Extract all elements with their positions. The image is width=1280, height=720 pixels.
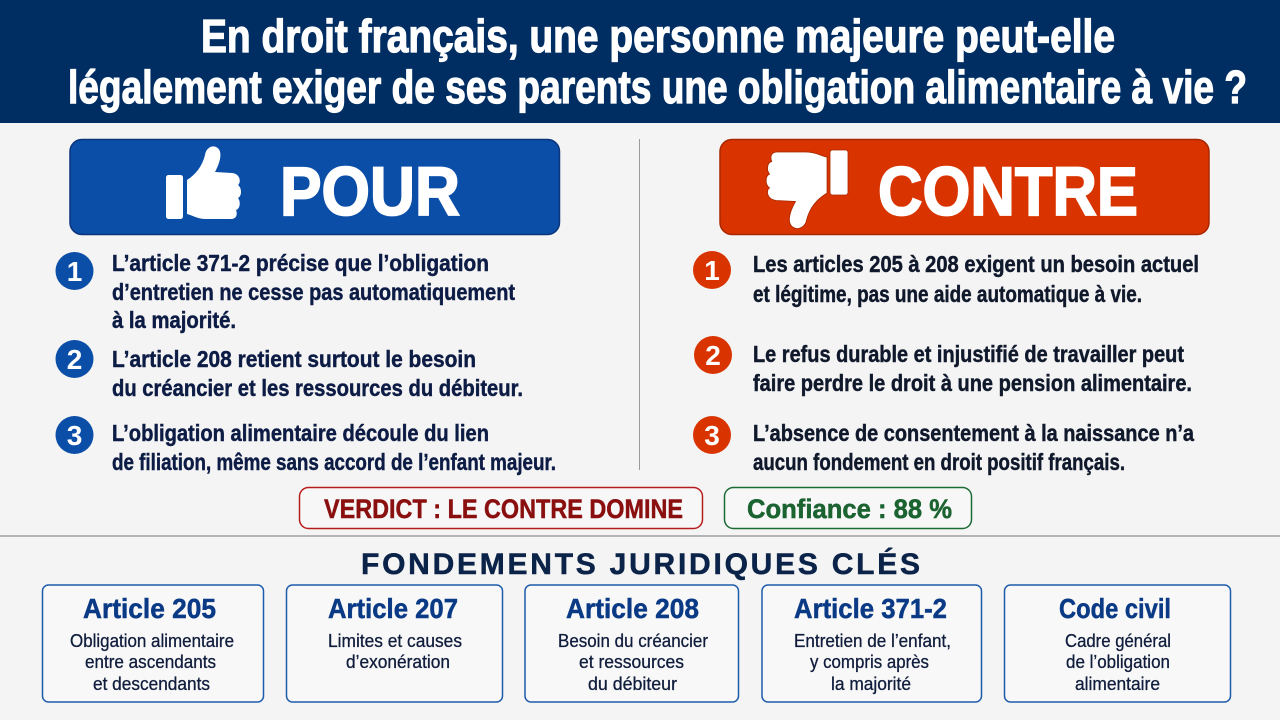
card: code civil — [1004, 585, 1230, 702]
verdict badge: VERDICT : LE CONTRE DOMINE — [324, 494, 683, 524]
contre argument 2: faire perdre le droit à une pension alimentaire. — [753, 370, 1192, 396]
title: En droit français, une personne majeure peut-elle — [201, 10, 1115, 62]
contre argument 3: aucun fondement en droit positif français. — [753, 449, 1125, 475]
pour argument 1: L’article 371-2 précise que l’obligation — [112, 250, 489, 276]
pour argument 3: 3 — [67, 420, 82, 451]
icon: thumbs down — [766, 150, 848, 229]
card: article 205: Obligation alimentaire — [70, 630, 234, 651]
card: article 371-2 — [762, 585, 982, 702]
contre argument 1: et légitime, pas une aide automatique à vie. — [753, 281, 1142, 307]
card: article 371-2: la majorité — [831, 673, 911, 694]
verdict badge — [300, 488, 702, 528]
contre argument 1 — [693, 251, 1199, 307]
pour argument 3: L’obligation alimentaire découle du lien — [112, 420, 489, 446]
card: article 208: et ressources — [579, 651, 684, 672]
heading: fondements juridiques: FONDEMENTS JURIDIQUES CLÉS — [361, 547, 920, 581]
pour argument 2: 2 — [67, 344, 82, 375]
card: article 208: du débiteur — [588, 673, 677, 694]
pour argument 3 — [56, 416, 556, 475]
card: article 207: Limites et causes — [328, 630, 462, 651]
pour argument 2 — [56, 340, 523, 401]
card: article 205: Article 205 — [83, 593, 216, 624]
contre header — [720, 140, 1209, 234]
contre label: CONTRE — [878, 153, 1138, 230]
card: article 207: d’exonération — [346, 651, 450, 672]
card: article 205 — [42, 585, 264, 702]
card: article 371-2: y compris après — [810, 651, 929, 672]
card: code civil: Cadre général — [1065, 630, 1171, 651]
contre argument 1: Les articles 205 à 208 exigent un besoin actuel — [753, 251, 1199, 277]
contre argument 3: 3 — [704, 420, 720, 451]
pour argument 2: du créancier et les ressources du débiteur. — [112, 375, 523, 401]
confidence badge — [724, 488, 972, 528]
card: article 208: Besoin du créancier — [558, 630, 708, 651]
pour argument 2: L’article 208 retient surtout le besoin — [112, 346, 476, 372]
title — [68, 10, 1247, 113]
pour argument 1 — [56, 250, 515, 333]
contre argument 1: 1 — [704, 255, 720, 286]
card: code civil: alimentaire — [1075, 673, 1160, 694]
pour label: POUR — [280, 153, 460, 230]
title banner — [0, 0, 1280, 123]
card: article 208 — [525, 585, 738, 702]
pour header — [70, 140, 560, 234]
card: article 208: Article 208 — [566, 593, 699, 624]
confidence badge: Confiance : 88 % — [747, 494, 952, 524]
pour argument 1: à la majorité. — [112, 307, 236, 333]
panel: contre — [693, 140, 1209, 475]
card: code civil: de l’obligation — [1066, 651, 1170, 672]
icon: thumbs up — [166, 146, 241, 219]
contre argument 2: Le refus durable et injustifié de travailler peut — [753, 341, 1184, 367]
contre argument 3 — [693, 416, 1194, 475]
pour argument 3: de filiation, même sans accord de l’enfant majeur. — [112, 449, 556, 475]
contre argument 2 — [694, 336, 1192, 396]
card: article 205: et descendants — [93, 673, 210, 694]
card: article 371-2: Article 371-2 — [794, 593, 947, 624]
pour argument 1: d’entretien ne cesse pas automatiquement — [112, 279, 515, 305]
contre argument 2: 2 — [705, 340, 721, 371]
panel: pour — [56, 140, 560, 475]
pour argument 1: 1 — [67, 256, 82, 287]
card: article 207 — [286, 585, 502, 702]
card: article 205: entre ascendants — [85, 651, 216, 672]
card: article 371-2: Entretien de l’enfant, — [794, 630, 951, 651]
contre argument 3: L’absence de consentement à la naissance n’a — [753, 420, 1194, 446]
card: article 207: Article 207 — [328, 593, 458, 624]
card: code civil: Code civil — [1059, 593, 1171, 624]
